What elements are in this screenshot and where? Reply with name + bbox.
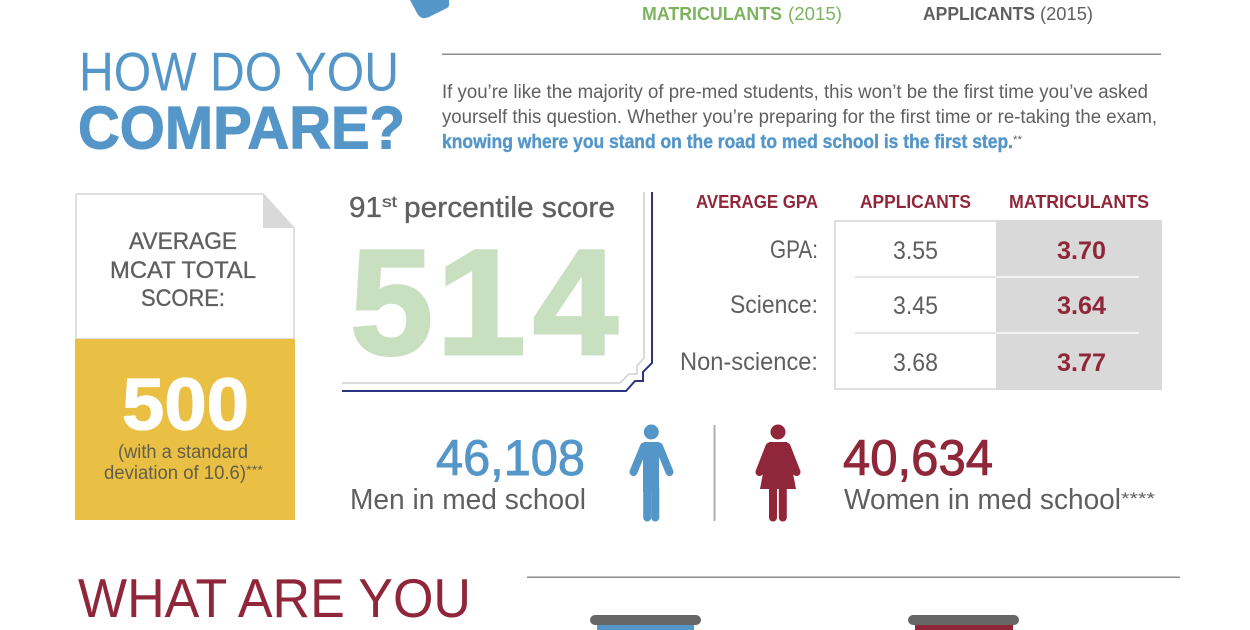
legend: applicants: APPLICANTS — [923, 4, 1035, 24]
card score: 500: 500 — [122, 364, 249, 446]
row: GPA: GPA: — [770, 236, 818, 264]
card note: standard deviation: (with a standard — [118, 442, 248, 463]
heading: how do you compare — [78, 40, 405, 162]
legend: applicants: (2015) — [1040, 4, 1093, 24]
card label — [110, 228, 256, 312]
percentile heading: 91 — [349, 192, 382, 224]
icon: woman — [760, 424, 796, 518]
table headers — [696, 191, 1149, 212]
row: Science: Science: — [730, 291, 818, 319]
percentile heading: st — [382, 194, 398, 211]
stat: women in med school — [843, 430, 1155, 516]
row: Non-science — [680, 348, 1106, 377]
table headers: APPLICANTS — [860, 191, 971, 212]
stat: women in med school: Women in med school — [844, 484, 1121, 516]
stat: men in med school: 46,108 — [436, 430, 585, 486]
legend: matriculants: MATRICULANTS — [642, 4, 782, 24]
card note: standard deviation: deviation of 10.6) — [104, 463, 246, 484]
table headers: MATRICULANTS — [1009, 191, 1149, 212]
percentile score: 514: 4 — [533, 218, 618, 386]
intro paragraph — [442, 82, 1157, 153]
row: Science: 3.45 — [893, 292, 938, 320]
card label: SCORE: — [141, 285, 225, 312]
percentile score: 514: 1 — [436, 218, 526, 386]
percentile score: 514 — [350, 218, 618, 386]
card label: AVERAGE — [129, 228, 237, 255]
icon: man — [634, 424, 670, 518]
row: GPA: 3.55 — [893, 237, 938, 265]
row: GPA: 3.70 — [1057, 237, 1106, 265]
intro paragraph: If you’re like the majority of pre-med students, this won’t be the first time you’ve asked — [442, 82, 1148, 103]
percentile score: 514: 5 — [350, 218, 433, 386]
card note: standard deviation: *** — [246, 463, 263, 477]
row: GPA — [770, 236, 1106, 265]
heading: how do you compare: HOW DO YOU — [79, 40, 399, 102]
table: average GPA — [680, 191, 1162, 390]
row: Non-science: 3.68 — [893, 349, 938, 377]
row: Non-science: Non-science: — [680, 348, 818, 376]
table headers: AVERAGE GPA — [696, 191, 818, 212]
row: Science — [730, 291, 1106, 320]
percentile heading: percentile score — [404, 192, 615, 224]
icon: red container top — [908, 615, 1019, 630]
row: Non-science: 3.77 — [1057, 349, 1106, 377]
panel: average MCAT total score card — [75, 193, 295, 520]
heading: what are you: WHAT ARE YOU — [78, 567, 471, 629]
intro paragraph: yourself this question. Whether you’re preparing for the first time or re-taking the exam, — [442, 107, 1157, 128]
heading: how do you compare: COMPARE? — [78, 94, 405, 162]
row: Science: 3.64 — [1057, 292, 1106, 320]
card note: standard deviation — [104, 442, 263, 484]
stat: women in med school: **** — [1121, 489, 1155, 508]
panel: 91st percentile score — [342, 192, 652, 391]
icon: folded page corner — [263, 193, 294, 228]
legend: matriculants: (2015) — [788, 4, 842, 24]
legend: applicants — [923, 4, 1093, 24]
card label: MCAT TOTAL — [110, 257, 256, 284]
stat: women in med school: 40,634 — [843, 430, 993, 486]
icon: blue container top — [590, 615, 701, 630]
stat: men in med school — [350, 430, 586, 516]
intro paragraph: knowing where you stand on the road to med school is the first step. — [442, 132, 1013, 153]
stat: men in med school: Men in med school — [350, 484, 586, 516]
icon: blue shape cut off at top — [410, 0, 449, 18]
intro paragraph: ** — [1013, 134, 1023, 146]
